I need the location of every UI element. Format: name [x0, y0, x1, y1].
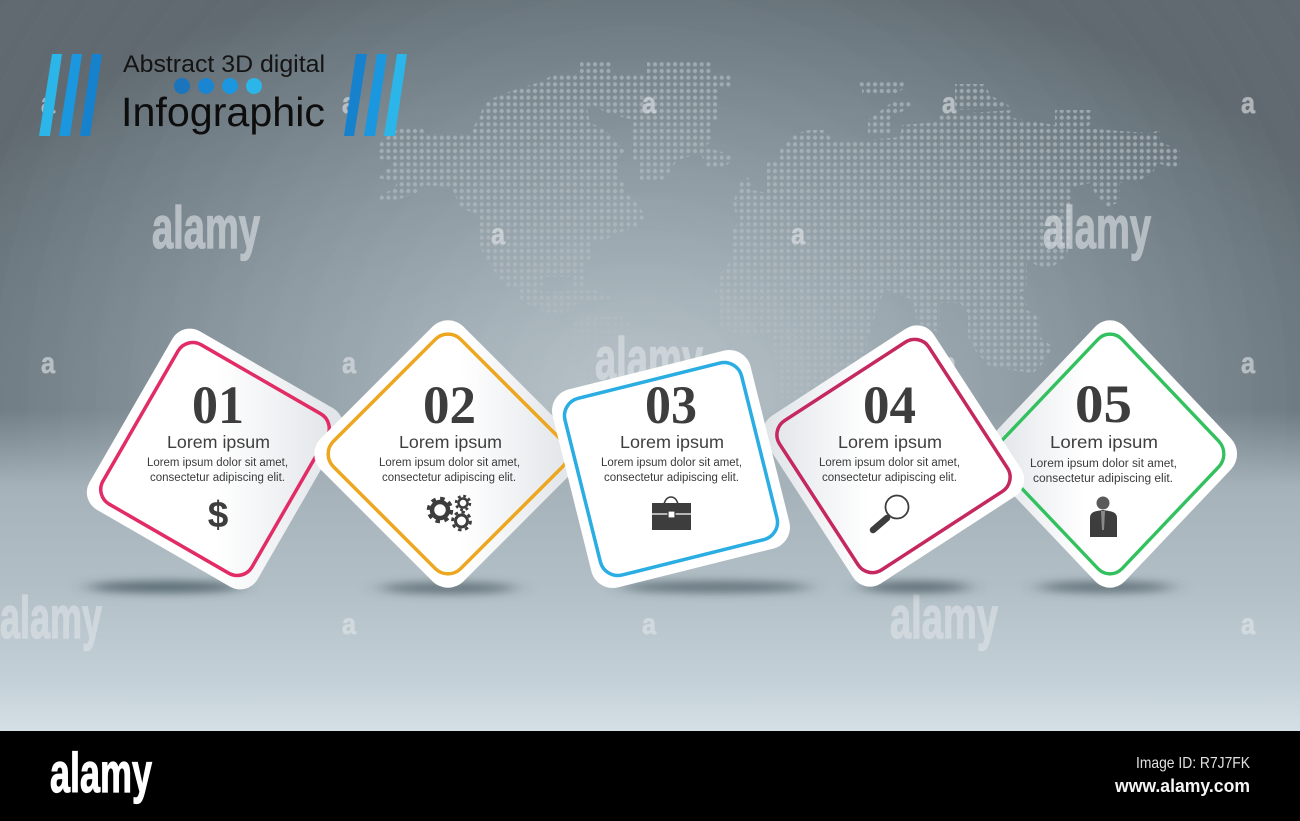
watermark: alamy repeated over the image: a	[942, 347, 956, 380]
number 02: 02	[423, 375, 476, 435]
number 04: 04	[863, 375, 916, 435]
watermark: alamy repeated over the image: alamy	[1043, 195, 1151, 261]
heading: Infographic: Infographic	[121, 89, 325, 135]
body text: consectetur adipiscing elit.	[150, 472, 285, 484]
four blue dots	[174, 78, 262, 94]
panel: card 02	[305, 311, 591, 597]
panel: card 01	[79, 321, 351, 597]
icon: briefcase	[652, 497, 691, 530]
watermark: alamy repeated over the image: a	[342, 87, 356, 120]
watermark: alamy repeated over the image: a	[491, 218, 505, 251]
left blue slashes	[39, 54, 102, 136]
body text: Lorem ipsum dolor sit amet,	[601, 457, 742, 469]
body text	[601, 457, 742, 484]
heading: Lorem ipsum	[167, 432, 270, 452]
body text: Lorem ipsum dolor sit amet,	[147, 457, 288, 469]
watermark: alamy repeated over the image: alamy	[0, 585, 102, 651]
watermark: alamy repeated over the image: a	[1241, 347, 1255, 380]
body text	[819, 457, 960, 484]
dotted world map	[378, 62, 1180, 400]
heading: Lorem ipsum	[838, 432, 942, 452]
map: western landmass	[378, 62, 732, 313]
map: southern landmass	[570, 317, 705, 400]
card 05 frame	[974, 311, 1246, 597]
number 03: 03	[645, 375, 697, 435]
logo: title block with blue bars	[39, 51, 407, 136]
body text: consectetur adipiscing elit.	[382, 472, 516, 484]
body text	[1030, 458, 1177, 485]
watermark: alamy repeated over the image: a	[1241, 608, 1255, 641]
footer logo: alamy	[50, 741, 152, 804]
body text: consectetur adipiscing elit.	[822, 472, 957, 484]
icon: magnifier	[873, 496, 908, 530]
watermark: alamy repeated over the image: a	[342, 347, 356, 380]
footer: black alamy bar	[0, 731, 1300, 821]
right blue slashes	[344, 54, 407, 136]
card 03 frame	[547, 345, 795, 593]
body text: Lorem ipsum dolor sit amet,	[819, 457, 960, 469]
watermark: alamy repeated over the image: a	[942, 87, 956, 120]
icon: businessman	[1090, 496, 1117, 537]
watermark: alamy repeated over the image: alamy	[152, 195, 260, 261]
icon: dollar: $	[208, 494, 229, 535]
number 01: 01	[192, 375, 244, 435]
watermark: alamy repeated over the image: a	[642, 608, 656, 641]
watermark: alamy repeated over the image: a	[642, 87, 656, 120]
watermark: alamy repeated over the image: alamy	[890, 585, 998, 651]
watermark: alamy repeated over the image: a	[41, 347, 55, 380]
number 05: 05	[1075, 374, 1132, 434]
heading: Lorem ipsum	[399, 432, 502, 452]
watermark: alamy repeated over the image: alamy	[595, 326, 703, 392]
watermark: alamy repeated over the image: a	[791, 218, 805, 251]
panel: card 03	[547, 345, 795, 593]
image id: Image ID: R7J7FK	[1136, 755, 1250, 772]
heading: Lorem ipsum	[1050, 432, 1158, 452]
website: www.alamy.com	[1114, 776, 1250, 796]
card 01 frame	[79, 321, 351, 597]
body text	[147, 457, 288, 484]
map: northern islands	[855, 81, 1013, 135]
watermark: alamy repeated over the image: a	[342, 608, 356, 641]
card 02 frame	[305, 311, 591, 597]
watermark: alamy repeated over the image: a	[1241, 87, 1255, 120]
body text: consectetur adipiscing elit.	[1033, 473, 1173, 485]
heading: Lorem ipsum	[620, 432, 724, 452]
body text: Lorem ipsum dolor sit amet,	[1030, 458, 1177, 470]
watermark: alamy repeated over the image: a	[41, 87, 55, 120]
panel: card 04	[755, 318, 1032, 594]
body text: consectetur adipiscing elit.	[604, 472, 739, 484]
watermark: alamy repeated over the image	[0, 87, 1255, 651]
heading: Abstract 3D digital: Abstract 3D digital	[123, 51, 325, 78]
card shadows on floor	[87, 581, 1173, 594]
panel: card 05	[974, 311, 1246, 597]
body text	[379, 457, 520, 484]
icon: gears	[428, 496, 470, 530]
map: eastern landmass	[715, 110, 1180, 398]
body text: Lorem ipsum dolor sit amet,	[379, 457, 520, 469]
card 04 frame	[755, 318, 1032, 594]
